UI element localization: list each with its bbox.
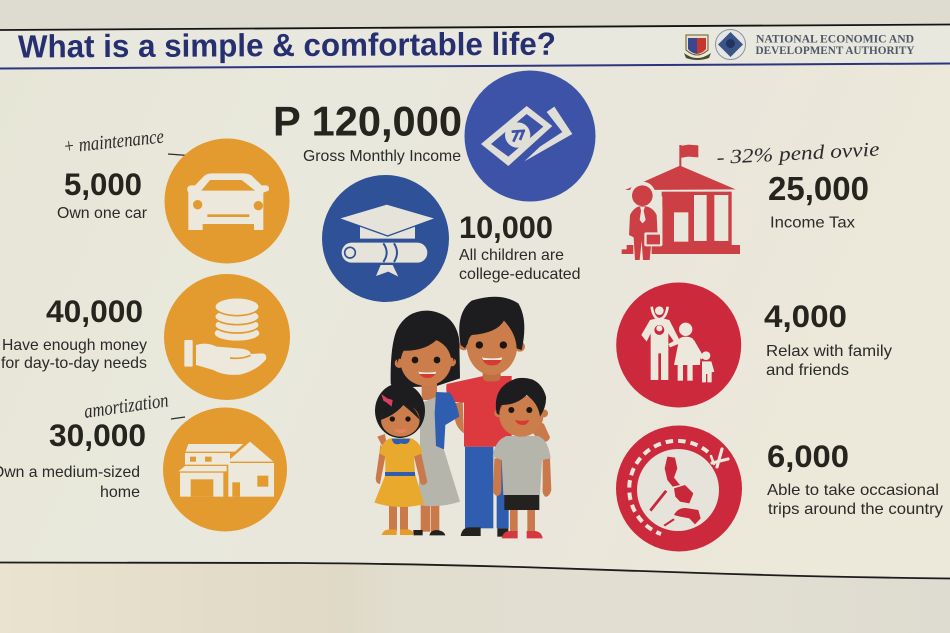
description: All children are: [459, 247, 564, 264]
description: and friends: [766, 362, 849, 379]
icon: government building and man: [622, 145, 740, 260]
icon: family silhouettes: [616, 282, 741, 408]
illustration: family: [374, 297, 551, 538]
description: [1, 337, 147, 372]
description: [0, 464, 140, 501]
amount: 4,000: [764, 298, 847, 334]
annotation: maintenance: + maintenance: [62, 126, 165, 158]
amount: 6,000: [767, 438, 849, 474]
annotation: amortization: amortization: [83, 389, 170, 423]
description: Able to take occasional: [767, 482, 939, 499]
description: home: [100, 484, 140, 501]
icon: car: [164, 138, 290, 264]
description: [767, 482, 943, 518]
agency name: NATIONAL ECONOMIC AND: [756, 32, 914, 46]
bottom margin strip: [0, 562, 950, 633]
figure: father: [446, 297, 525, 537]
figure: boy: [493, 378, 551, 538]
icon: houses: [163, 408, 287, 532]
description: college-educated: [459, 266, 580, 283]
panel: income tax: [622, 138, 880, 260]
description: Income Tax: [770, 214, 855, 232]
agency name: DEVELOPMENT AUTHORITY: [756, 43, 915, 57]
annotation: pending: - 32% pend ovvie: [716, 138, 880, 169]
title: What is a simple & comfortable life?: [18, 26, 556, 64]
amount: 40,000: [46, 293, 143, 329]
figure: mother: [391, 311, 460, 535]
agency name: [756, 32, 915, 57]
panel: medium-sized home: [0, 389, 287, 532]
panel: relax with family: [616, 282, 892, 408]
description: Relax with family: [766, 343, 892, 360]
header band: [0, 24, 950, 68]
panel: education: [322, 175, 580, 302]
logo: NEDA seal: [716, 30, 746, 60]
amount: 5,000: [64, 167, 142, 202]
amount: 10,000: [459, 209, 553, 245]
description: [459, 247, 580, 283]
description: trips around the country: [768, 501, 943, 518]
caption: Gross Monthly Income: [303, 148, 461, 165]
bottom rule: [0, 562, 950, 578]
panel: own one car: [57, 126, 290, 264]
figure: girl: [374, 383, 427, 535]
description: [766, 343, 892, 379]
icon: Philippine map with flight path: [616, 426, 742, 552]
amount: P 120,000: [273, 98, 462, 144]
logo: Philippine seal: [684, 35, 711, 60]
description: for day-to-day needs: [1, 355, 147, 372]
icon: banknotes: [464, 70, 596, 202]
amount: 25,000: [768, 170, 869, 207]
panel: day-to-day money: [1, 274, 290, 400]
icon: graduation cap and diploma: [322, 175, 449, 302]
description: Have enough money: [2, 337, 147, 354]
icon: coins and hand: [164, 274, 290, 400]
panel: gross monthly income: [273, 70, 596, 202]
top margin strip: [0, 0, 950, 30]
description: Own one car: [57, 205, 147, 222]
amount: 30,000: [49, 417, 146, 453]
panel: occasional trips: [616, 426, 943, 552]
